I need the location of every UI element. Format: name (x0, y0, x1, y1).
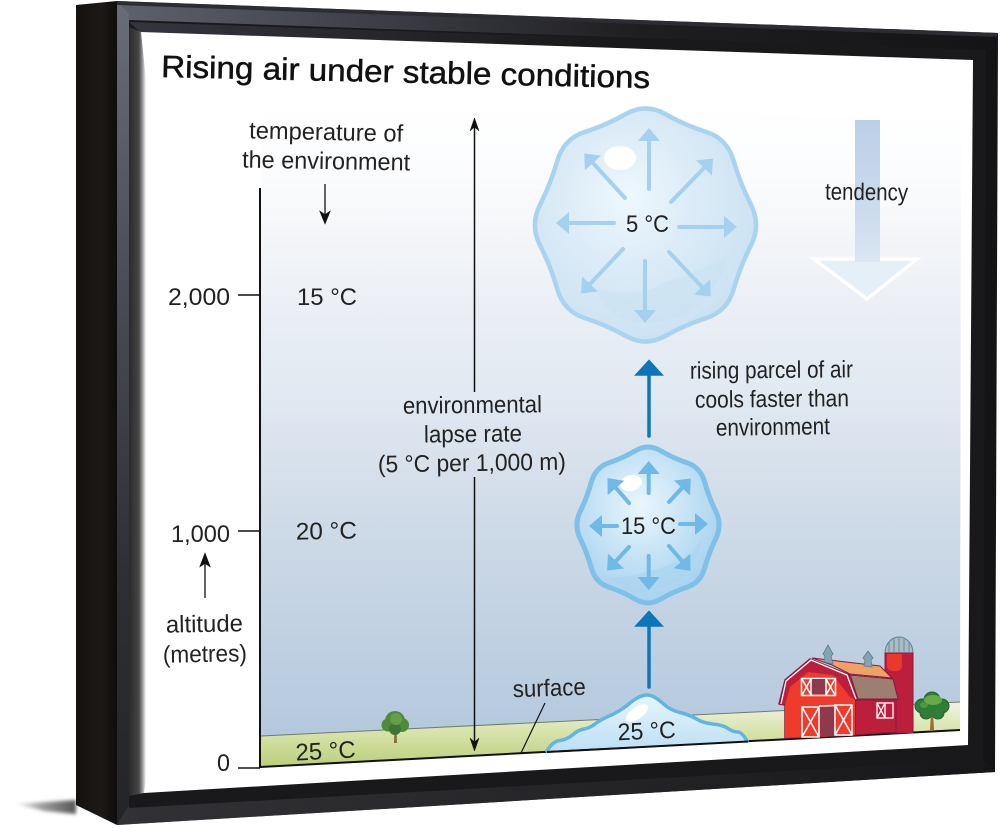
lapse rate label: (5 °C per 1,000 m) (378, 449, 566, 478)
silo (885, 637, 913, 733)
small air parcel 15 C (577, 447, 719, 603)
axis labels (168, 284, 230, 777)
arrow: temperature down (320, 184, 330, 223)
canvas (141, 32, 973, 793)
floor shadow (16, 800, 76, 814)
barn roof (812, 658, 898, 699)
axis labels: 2,000 (168, 284, 230, 311)
axis labels: 0 (217, 750, 230, 777)
arrow: altitude up (200, 554, 210, 598)
lapse rate label: environmental (403, 391, 542, 420)
canvas edge shadow (129, 27, 147, 796)
sky background (261, 100, 961, 737)
barn upper window (802, 678, 836, 696)
barn front (779, 659, 858, 738)
surface air parcel 25 C: 25 °C (617, 717, 676, 746)
barn cupolas (823, 645, 873, 667)
temperature of the environment label (242, 117, 411, 176)
altitude label: altitude (166, 610, 243, 639)
rising parcel label: rising parcel of air (690, 356, 853, 385)
environment temperatures: 25 °C (295, 736, 356, 767)
altitude axis (238, 188, 960, 768)
tree left (382, 711, 409, 743)
barn door (802, 705, 852, 737)
tendency arrow (814, 120, 917, 299)
large air parcel 5 C: 5 °C (626, 211, 669, 238)
tree right (915, 692, 949, 730)
altitude label: (metres) (163, 640, 247, 669)
surface label (512, 674, 586, 753)
rising arrow lower (638, 613, 660, 687)
environment temperatures: 15 °C (297, 284, 357, 311)
lapse rate label (378, 391, 566, 478)
rising parcel label (690, 356, 853, 442)
rising arrow upper (638, 362, 660, 436)
tendency label: tendency (825, 179, 908, 207)
environment temperatures (295, 284, 357, 767)
barn side wall (855, 700, 896, 735)
surface air parcel 25 C (547, 695, 748, 752)
environment temperatures: 20 °C (296, 517, 357, 546)
lapse rate label: lapse rate (424, 420, 522, 449)
lapse rate double arrow (470, 118, 479, 751)
barn (779, 645, 898, 738)
rising parcel label: environment (716, 413, 830, 442)
ground (261, 702, 960, 767)
small air parcel 15 C: 15 °C (621, 513, 676, 540)
large air parcel 5 C (535, 108, 756, 342)
title: Rising air under stable conditions (161, 49, 651, 95)
surface label: surface (512, 674, 586, 703)
altitude label (163, 610, 247, 669)
axis labels: 1,000 (171, 521, 230, 548)
temperature of the environment label: the environment (242, 147, 411, 176)
barn side window (877, 703, 893, 718)
temperature of the environment label: temperature of (249, 117, 404, 148)
rising parcel label: cools faster than (695, 385, 849, 414)
